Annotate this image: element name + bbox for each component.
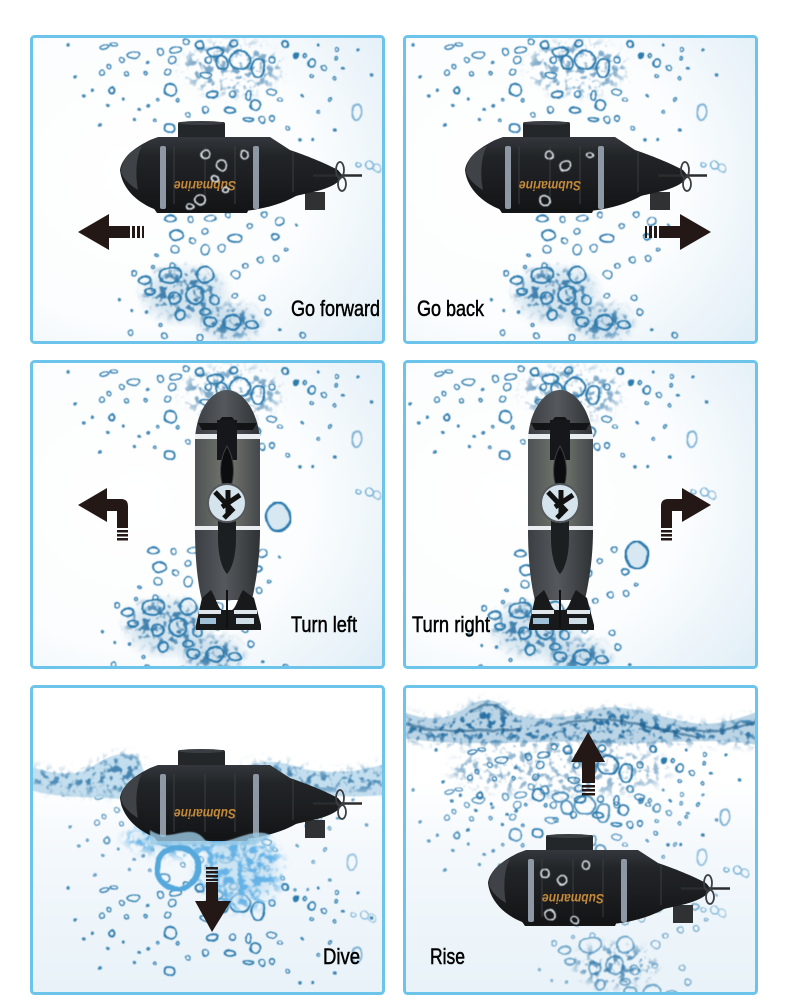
label: dive: Dive [323, 944, 360, 969]
panel: turn left [31, 361, 384, 673]
panel border [32, 362, 384, 668]
arrow: turn left [78, 488, 128, 540]
panel border [404, 686, 756, 994]
arrow: go forward [78, 214, 144, 250]
label: turn right: Turn right [412, 612, 490, 637]
panel: go back [404, 36, 757, 343]
submarine: below surface [488, 834, 730, 926]
arrow: dive [195, 867, 231, 932]
label: rise: Rise [430, 944, 465, 969]
panel border [404, 36, 756, 342]
panel border [404, 362, 756, 668]
submarine: top view [195, 390, 261, 630]
label: go back: Go back [417, 296, 485, 321]
panel: dive [31, 686, 384, 1004]
water surface [404, 700, 757, 745]
submarine: side view heading right [465, 121, 707, 213]
submarine: half submerged: Submarine [174, 806, 236, 822]
splash [125, 820, 282, 910]
submarine: below surface: Submarine [542, 891, 604, 907]
panel border [32, 686, 384, 994]
label: turn left: Turn left [291, 612, 357, 637]
panel: rise [404, 686, 757, 1004]
panel: turn right [402, 361, 757, 676]
submarine: half submerged [120, 749, 362, 845]
panel border [32, 36, 384, 342]
arrow: turn right [661, 488, 711, 540]
submarine: top view [528, 390, 594, 630]
arrow: rise [571, 732, 605, 796]
label: go forward: Go forward [291, 296, 380, 321]
submarine: side view heading left [120, 121, 362, 213]
water surface [31, 754, 384, 802]
panel: go forward [31, 36, 384, 343]
arrow: go back [645, 214, 711, 250]
submarine: side view heading left: Submarine [174, 178, 236, 194]
submarine: side view heading right: Submarine [519, 178, 581, 194]
